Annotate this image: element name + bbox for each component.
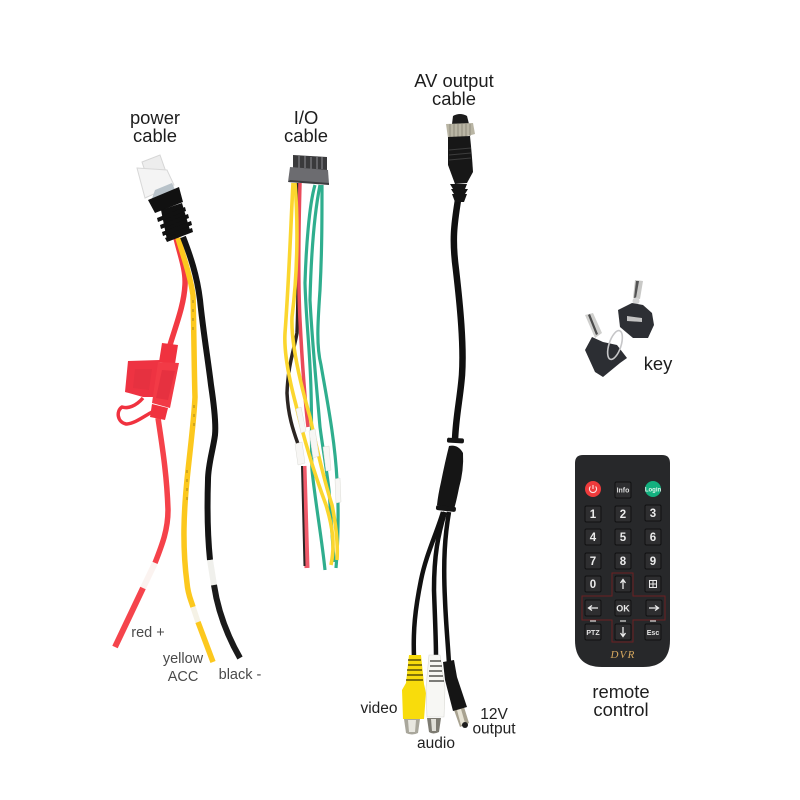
- number keypad: 6: [650, 532, 656, 544]
- number keypad: 1: [590, 509, 597, 521]
- label: key: key: [644, 353, 673, 374]
- heading: remote control: remote: [592, 681, 650, 702]
- label: 12V output: output: [472, 720, 516, 738]
- brand: DVR: DVR: [610, 649, 635, 661]
- number keypad: 4: [590, 532, 597, 544]
- navigation keys: [585, 576, 662, 640]
- icon: red fuse holder: [118, 343, 179, 424]
- button: PTZ: PTZ: [586, 630, 600, 637]
- number keypad: [585, 505, 661, 592]
- button: Esc: [645, 624, 661, 640]
- icon: aviation connector: [446, 114, 475, 202]
- navigation keys: OK: [616, 604, 630, 614]
- number keypad: 8: [620, 556, 627, 568]
- yellow wire: [178, 238, 213, 662]
- label: yellow ACC: yellow: [163, 651, 203, 667]
- heading: I/O cable: I/O: [294, 107, 318, 128]
- button: Login: Login: [645, 488, 661, 494]
- button: power: [585, 481, 601, 497]
- number keypad: 3: [650, 508, 656, 520]
- heading: AV output cable: cable: [432, 88, 476, 109]
- label: red +: red +: [131, 625, 165, 641]
- remote body: [575, 455, 670, 667]
- main black cable: [454, 200, 463, 440]
- icon: cable junction: [436, 438, 464, 512]
- heading: I/O cable: cable: [284, 125, 328, 146]
- label: audio: audio: [417, 735, 455, 752]
- button: Esc: Esc: [647, 630, 659, 637]
- number keypad: 7: [590, 556, 596, 568]
- panel: keys: [585, 280, 673, 377]
- icon: right key: [618, 280, 654, 338]
- red and black wires: [287, 183, 308, 568]
- media marks: [590, 620, 656, 622]
- label: black -: black -: [219, 667, 262, 683]
- icon: DC power plug: [443, 660, 469, 728]
- heading: power cable: power: [130, 107, 180, 128]
- icon: I/O connector: [288, 155, 329, 185]
- button: Info: Info: [617, 488, 629, 494]
- label: yellow ACC: ACC: [168, 669, 198, 685]
- button: grid: [645, 576, 661, 592]
- number keypad: 9: [650, 556, 656, 568]
- panel: I/O cable: [284, 107, 341, 570]
- icon: yellow RCA plug: [402, 655, 426, 734]
- icon: white RCA plug: [426, 655, 445, 734]
- green wires: [305, 185, 338, 570]
- icon: white plug: [137, 155, 176, 204]
- number keypad: 2: [620, 509, 626, 521]
- bundle of I/O wires: [285, 183, 341, 570]
- button: Login: [645, 481, 661, 497]
- red wire with fuse lead: [115, 238, 185, 647]
- label: video: video: [360, 700, 398, 717]
- black wire: [183, 237, 240, 658]
- panel: remote control: [575, 455, 670, 720]
- white wire sleeves: [295, 407, 341, 503]
- panel: AV output cable: [360, 70, 516, 752]
- red d-pad outline: [582, 573, 665, 642]
- label: 12V output: 12V: [480, 706, 508, 723]
- icon: left key: [585, 313, 627, 377]
- button: PTZ: [585, 624, 601, 640]
- icon: black connector boot: [148, 187, 193, 242]
- heading: power cable: cable: [133, 125, 177, 146]
- yellow wires: [285, 183, 337, 565]
- button: Info: [615, 482, 631, 498]
- number keypad: 0: [590, 579, 596, 591]
- heading: remote control: control: [593, 699, 649, 720]
- heading: AV output cable: AV output: [414, 70, 494, 91]
- panel: power cable: [115, 107, 262, 685]
- number keypad: 5: [620, 532, 627, 544]
- branch cables: [414, 512, 449, 664]
